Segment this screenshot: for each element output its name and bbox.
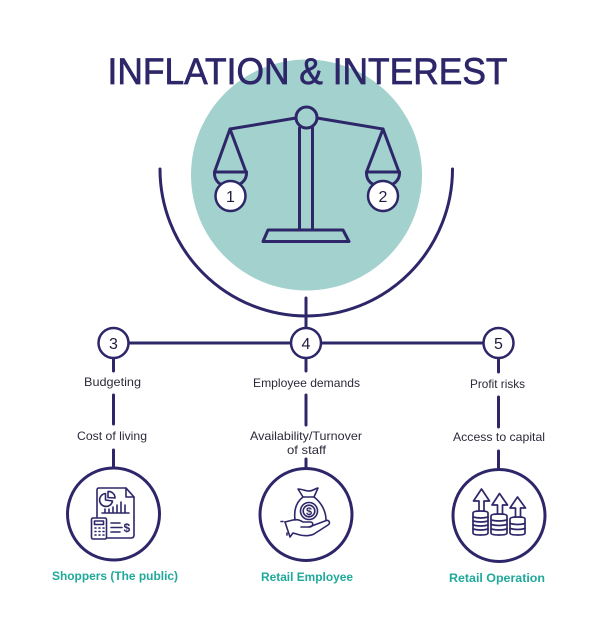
marker 3 (98, 328, 128, 358)
icon: money bag over open hand (281, 488, 329, 537)
label: Availability/Turnover of staff: Availability/Turnover (250, 429, 362, 443)
title: INFLATION & INTEREST (108, 51, 508, 92)
connector network (114, 298, 498, 470)
label: Shoppers (The public): Shoppers (The public) (52, 569, 178, 583)
marker 1: 1 (226, 189, 235, 206)
label: Employee demands: Employee demands (253, 376, 360, 390)
marker 5 (484, 328, 514, 358)
label: Profit risks: Profit risks (470, 377, 525, 391)
panel: retail employee (260, 468, 352, 560)
cradle arc (160, 169, 452, 316)
marker 2: 2 (379, 189, 388, 206)
label: Access to capital: Access to capital (453, 430, 545, 444)
icon: financial report and calculator (92, 488, 134, 539)
label: Budgeting: Budgeting (84, 375, 141, 389)
label: Availability/Turnover of staff (250, 429, 362, 457)
label: Cost of living: Cost of living (77, 429, 147, 443)
marker 3: 3 (109, 336, 118, 353)
icon text: dollar sign: $ (124, 521, 130, 535)
marker 2 (368, 181, 398, 211)
panel: retail operation (453, 470, 545, 562)
panel: shoppers (68, 468, 160, 560)
marker 5: 5 (494, 336, 503, 353)
icon: coin stacks with rising arrows (473, 489, 526, 535)
icon text: dollar sign: $ (306, 506, 312, 518)
marker 4 (291, 328, 321, 358)
label: Availability/Turnover of staff: of staff (287, 443, 327, 457)
label: Retail Employee: Retail Employee (261, 570, 353, 584)
label: Retail Operation: Retail Operation (449, 571, 545, 585)
icon: balance scale (214, 107, 400, 242)
marker 4: 4 (302, 336, 311, 353)
teal background circle (191, 60, 422, 290)
marker 1 (216, 181, 246, 211)
